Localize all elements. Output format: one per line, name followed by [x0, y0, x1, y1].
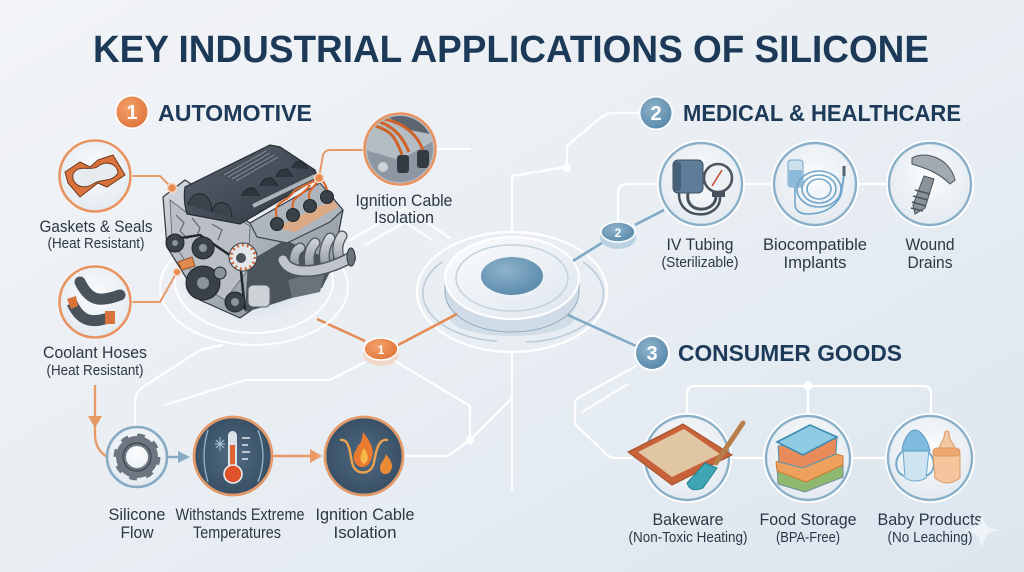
label: food storage: Food Storage	[760, 510, 856, 529]
label: gaskets	[40, 217, 152, 252]
label: iv tubing: (Sterilizable)	[662, 254, 739, 271]
label: iv tubing	[662, 235, 739, 271]
label: iv tubing: IV Tubing	[666, 235, 734, 254]
label: wound drains: Wound	[906, 235, 954, 254]
label: ignition top: Ignition Cable	[356, 191, 452, 210]
label: ignition bottom: Isolation	[334, 523, 396, 542]
label: ignition bottom: Ignition Cable	[316, 505, 414, 524]
network lines	[135, 113, 931, 490]
icon: blood pressure cuff	[657, 140, 745, 228]
section 3 heading: CONSUMER GOODS	[678, 340, 902, 366]
icon: hoses	[58, 264, 132, 340]
label: withstands	[176, 505, 304, 542]
arrow: blue	[167, 451, 190, 463]
label: wound drains: Drains	[908, 253, 952, 272]
label: bakeware	[628, 510, 748, 546]
icon: gear	[107, 427, 167, 487]
label: food storage	[760, 510, 856, 546]
arrow: down to silicone flow	[88, 385, 106, 456]
engine	[163, 145, 355, 318]
label: gaskets: (Heat Resistant)	[48, 235, 144, 252]
label: ignition bottom	[316, 505, 414, 542]
label: food storage: (BPA-Free)	[776, 529, 840, 546]
section 3 heading	[634, 335, 902, 371]
leader dots	[168, 174, 324, 276]
connector: medical node	[573, 210, 664, 261]
coil boots	[270, 190, 334, 230]
section 2 heading: MEDICAL & HEALTHCARE	[683, 100, 961, 126]
arrow: orange	[273, 449, 322, 463]
connector: medical node: 2	[615, 226, 622, 240]
pulleys and belt	[168, 235, 245, 310]
label: withstands: Temperatures	[193, 523, 281, 542]
section 2 heading: 2	[650, 103, 662, 125]
section 1 heading	[115, 95, 312, 129]
label: bakeware: (Non-Toxic Heating)	[628, 529, 748, 546]
label: baby products	[878, 510, 982, 546]
label: implants: Implants	[784, 253, 846, 272]
icon: iv bag and tubing	[771, 140, 859, 228]
icon: sparkle	[963, 513, 1001, 549]
icon: ignition cable	[362, 112, 438, 186]
label: bakeware: Bakeware	[652, 510, 724, 529]
title: KEY INDUSTRIAL APPLICATIONS OF SILICONE	[93, 29, 929, 71]
section 1 heading: AUTOMOTIVE	[158, 100, 312, 126]
label: implants	[763, 235, 867, 272]
valve cover	[184, 145, 318, 224]
icon: thermometer	[194, 417, 272, 495]
section 2 heading	[639, 96, 961, 130]
ignition wires	[276, 178, 327, 218]
label: withstands: Withstands Extreme	[176, 505, 304, 524]
leader lines	[131, 150, 364, 302]
label: coolant: Coolant Hoses	[43, 343, 147, 362]
exhaust manifold	[283, 236, 350, 271]
label: baby products: (No Leaching)	[888, 529, 973, 546]
label: silicone flow: Flow	[120, 523, 154, 542]
label: baby products: Baby Products	[878, 510, 982, 529]
label: implants: Biocompatible	[763, 235, 867, 254]
icon: gasket	[58, 138, 132, 214]
label: coolant	[43, 343, 147, 379]
label: coolant: (Heat Resistant)	[46, 362, 144, 379]
section 3 heading: 3	[646, 343, 658, 365]
label: gaskets: Gaskets & Seals	[40, 217, 152, 236]
icon: bakeware	[628, 413, 743, 503]
cylinder head	[250, 183, 343, 243]
coolant outlet	[178, 257, 195, 270]
icon: flame	[325, 417, 403, 495]
label: ignition top	[356, 191, 452, 227]
hub centre lens	[480, 256, 544, 296]
connector: automotive node: 1	[378, 343, 385, 357]
icon: screw	[886, 140, 974, 228]
engine block	[163, 180, 343, 318]
label: wound drains	[906, 235, 954, 272]
icon: food storage	[763, 413, 853, 503]
icon: baby products	[885, 413, 975, 503]
connector: automotive node	[317, 314, 457, 366]
engine platform rings	[160, 229, 348, 345]
connector: consumer line	[568, 315, 636, 346]
section 1 heading: 1	[126, 102, 138, 124]
label: silicone flow: Silicone	[108, 505, 166, 524]
alternator	[229, 243, 257, 271]
label: silicone flow	[108, 505, 166, 542]
central hub	[417, 232, 607, 352]
label: ignition top: Isolation	[374, 208, 434, 227]
